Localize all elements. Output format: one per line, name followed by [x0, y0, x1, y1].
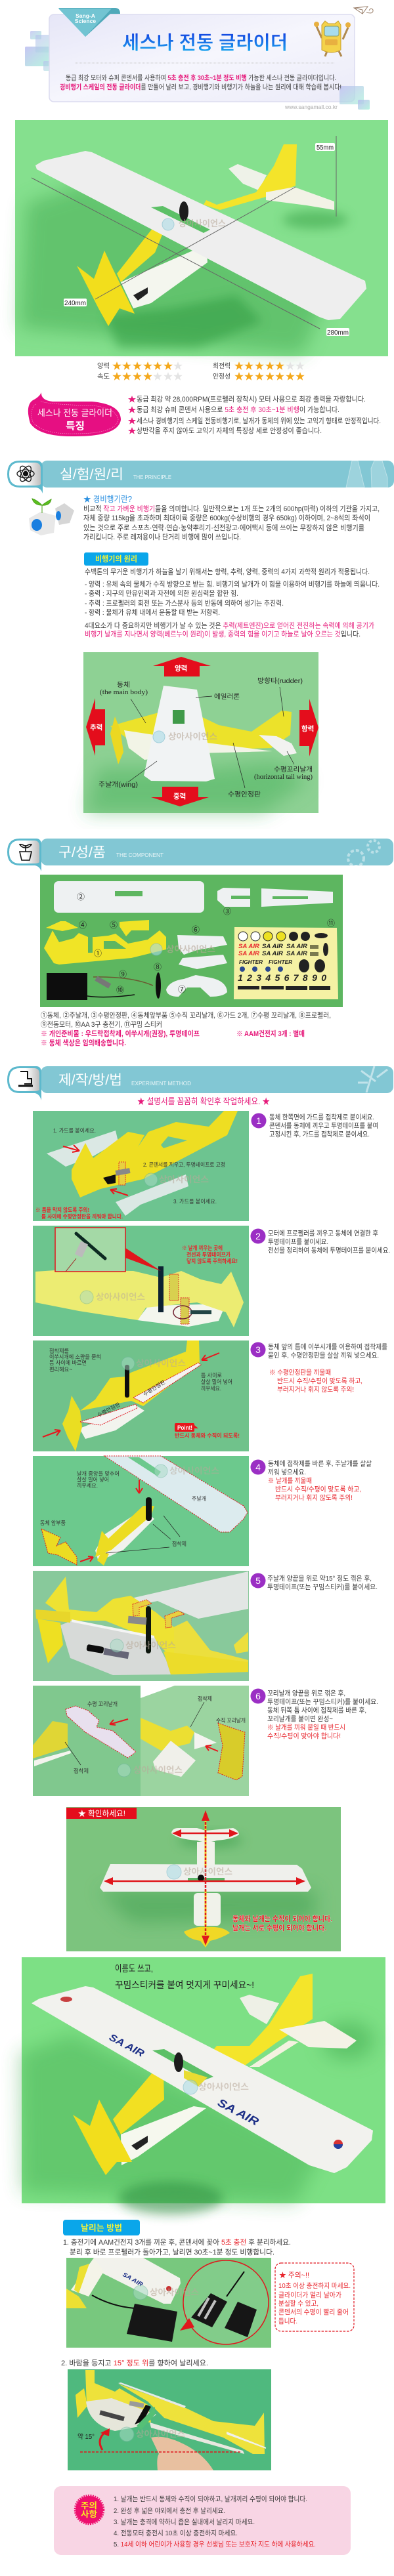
watermark: 상아사이언스: [183, 1867, 232, 1877]
photo notes: 틈 사이에 수평안정판을 끼워야 합니다.: [41, 1213, 123, 1220]
ribbon badge: Science: [75, 18, 96, 24]
section header: component: THE COMPONENT: [116, 852, 164, 858]
intro text: [60, 73, 341, 91]
photo notes: [182, 1245, 238, 1264]
point badge: Point!: [177, 1424, 192, 1431]
photo notes: [74, 1695, 246, 1774]
watermark: [150, 944, 215, 955]
step 1 text: [269, 1113, 378, 1138]
feature list: 동급 최강 약 28,000RPM(프로펠러 장착시) 모터 사용으로 최강 출력을 자랑합니다.: [137, 394, 366, 404]
check label: ★ 확인하세요!: [78, 1809, 125, 1818]
icon: dice with sprout: [29, 499, 74, 535]
rating: 안정성: [213, 372, 305, 381]
step 3 text: 부러지거나 휘지 않도록 주의!: [277, 1386, 354, 1394]
step 4 text: [268, 1460, 372, 1502]
part: tail wing: [166, 975, 227, 997]
point badge: [175, 1423, 198, 1432]
caution note: 10초 이상 충전하지 마세요.: [278, 2281, 351, 2290]
step 2 text: 투명테이프를 붙이세요.: [268, 1238, 328, 1246]
caution list: 4. 전동모터 충전시 10초 이상 충전하지 마세요.: [114, 2529, 238, 2537]
button: 비행기의 원리: [84, 552, 148, 566]
caution note: 글라이더가 멀리 날아가: [278, 2291, 341, 2299]
photo notes: 닿지 않도록 주의하세요!: [186, 1258, 238, 1264]
watermark: 상아사이언스: [136, 1358, 186, 1368]
feature list: 상반각을 주지 않아도 고익기 자체의 특징상 세로 안정성이 좋습니다.: [137, 426, 322, 435]
step 4 badge: [251, 1459, 265, 1475]
photo notes: 끼우세요.: [201, 1385, 221, 1392]
button: 날리는 방법: [63, 2220, 140, 2235]
icon: sparkle: [358, 1066, 387, 1092]
part numbers: ④: [79, 921, 87, 930]
text: definition paragraph: 있는 것으로 주로 스포츠·연락·연습·농약뿌리기·선전광고·에어택시 등에 쓰이는 무장하지 않은 비행기를: [83, 523, 364, 532]
rating: 양력: 양력: [97, 362, 110, 370]
arrow: 추력: 추력: [90, 723, 102, 732]
watermark: 상아사이언스: [166, 944, 215, 954]
step 6 text: 꼬리날개를 붙이면 완성~: [267, 1714, 333, 1723]
part labels: 수평안정판: [228, 791, 261, 799]
watermark: 상아사이언스: [168, 732, 217, 741]
part numbers: ⑪: [327, 919, 335, 928]
photo notes: 수평 꼬리날개: [87, 1701, 118, 1707]
part: propeller: [156, 972, 161, 999]
caution note: ★ 주의~!!: [279, 2271, 309, 2279]
red arrows: [110, 1719, 218, 1751]
button: 비행기의 원리: 비행기의 원리: [95, 554, 137, 564]
watermark: 상아사이언스: [136, 2429, 185, 2439]
part labels: 방향타(rudder): [257, 677, 303, 685]
text: flight principle: - 중력 : 지구의 만유인력과 자전에 의한 원심력을 합한 힘.: [85, 589, 238, 598]
text: flight principle: 비행기 날개를 지나면서 양력(베르누이 원리)이 발생, 중력의 힘을 이기고 하늘로 날아 오르는 것입니다.: [85, 629, 361, 638]
components photo: [40, 875, 343, 1007]
arrow: 항력: 항력: [301, 724, 314, 733]
section title: 제/작/방/법: [58, 1073, 122, 1088]
text: flying step 1: [63, 2237, 291, 2256]
website url: www.sangamall.co.kr: [284, 104, 338, 110]
step 5 photo: [33, 1571, 249, 1681]
icon: plant pot: [20, 844, 32, 860]
part: nose piece: [41, 1529, 77, 1565]
component caption: ※ 동체 색상은 임의배송합니다.: [41, 1038, 126, 1047]
red wedge: [125, 1248, 161, 1271]
watermark: 상아사이언스: [125, 1640, 176, 1650]
intro text: 동급 최강 모터와 슈퍼 콘덴서를 사용하여 5초 충전 후 30초~1분 정도 비행 가능한 세스나 전동 글라이더입니다.: [66, 73, 336, 82]
step 6 photo: [33, 1686, 249, 1796]
diagram photo: four forces: [83, 652, 318, 813]
section title: 구/성/품: [58, 845, 106, 860]
photo notes: 이쑤시개에 소량을 묻혀: [49, 1354, 101, 1360]
step 3 badge: 3: [255, 1344, 261, 1355]
part numbers: ⑤: [110, 921, 118, 930]
leader lines: [128, 687, 294, 788]
part: sticker sheet: SA AIR: [286, 943, 308, 949]
step 2 badge: 2: [255, 1231, 261, 1241]
photo notes: 편리해요~: [49, 1366, 72, 1373]
text: flight principle: [85, 567, 380, 638]
feature list: [128, 394, 381, 435]
check label: [66, 1808, 137, 1819]
watermark: 상아사이언스: [169, 1466, 219, 1476]
photo notes: 동체 앞부품: [40, 1520, 66, 1526]
section header: method: EXPERIMENT METHOD: [131, 1081, 191, 1087]
handwritten note: [115, 1963, 254, 1990]
photo notes: 수직 꼬리날개: [216, 1717, 246, 1724]
horizon line: [80, 2451, 241, 2453]
part labels: [98, 677, 313, 799]
arrow: 양력: 양력: [175, 664, 187, 673]
angle label: 약 15°: [77, 2433, 95, 2441]
component caption: [41, 1011, 331, 1047]
red arrows: [63, 1145, 128, 1195]
photo notes: 2. 콘덴서를 끼우고, 투명테이프로 고정: [143, 1161, 225, 1168]
dimension label: 240mm: 240mm: [64, 300, 86, 307]
rating: 속도: [97, 372, 183, 381]
photo notes: 날개 중앙을 맞추어: [77, 1470, 120, 1477]
part: stabilizer: [217, 888, 333, 907]
part: main wing: [54, 881, 204, 913]
caution list: [114, 2495, 316, 2548]
decorative squares left: [25, 31, 58, 71]
component caption: ※ AAM건전지 3개 : 별매: [236, 1029, 305, 1038]
caution list: 1. 날개는 반드시 동체와 수직이 되야하고, 날개끼리 수평이 되어야 합니다.: [114, 2495, 307, 2503]
part: motor: [93, 976, 153, 988]
caution note: 듭니다.: [278, 2317, 297, 2325]
tape mark left: [133, 1600, 152, 1616]
ratings: [97, 362, 305, 381]
part: guards: [177, 935, 227, 969]
red arrows: [43, 1353, 219, 1437]
watermark: [167, 1865, 232, 1879]
step 1 text: 고정시킨 후, 가드를 접착제로 붙이세요.: [269, 1131, 370, 1138]
text: flight principle: 4대요소가 다 중요하지만 비행기가 날 수 있는 것은 추력(제트엔진)으로 얻어진 전진하는 속력에 의해 공기가: [85, 621, 374, 630]
ribbon badge: Sang-A: [76, 12, 95, 19]
icon: atom: [17, 465, 34, 483]
step 1 text: 콘덴서를 동체에 끼우고 투명테이프를 붙여: [269, 1122, 378, 1130]
photo notes: 접착제: [198, 1695, 212, 1702]
watermark: [153, 731, 217, 743]
part labels: 동체: [117, 681, 130, 689]
step 5 badge: [251, 1573, 265, 1588]
text: flying step 2: 2. 바람을 등지고 15° 정도 위를 향하여 날리세요.: [61, 2358, 208, 2367]
rating: 회전력: 회전력: [213, 362, 230, 370]
ribbon badge: [58, 8, 120, 37]
part numbers: [77, 892, 335, 995]
part: sticker sheet: FIGHTER: [269, 959, 292, 965]
part: yellow foam: [44, 920, 166, 965]
caution list: 2. 완성 후 넓은 야외에서 충전 후 날리세요.: [114, 2506, 225, 2515]
part numbers: ⑩: [116, 986, 124, 995]
hand: [151, 2437, 213, 2470]
arrow: 추력: [86, 698, 105, 756]
hero photo: [15, 120, 388, 356]
caution list: 5. 14세 이하 어린이가 사용할 경우 선생님 또는 보호자 지도 하에 사용하세요.: [114, 2540, 316, 2548]
step 1 text: 동체 한쪽면에 가드를 접착제로 붙이세요.: [269, 1113, 374, 1121]
icon: microscope: [18, 1071, 33, 1086]
step 6 badge: [251, 1689, 265, 1703]
step 6 text: 꼬리날개 양끝을 위로 꺾은 후,: [267, 1689, 345, 1697]
part numbers: ③: [223, 907, 231, 916]
caution note: [275, 2263, 354, 2331]
watermark: 상아사이언스: [198, 2082, 249, 2092]
photo notes: 3. 가드를 붙이세요.: [173, 1198, 217, 1205]
watermark: 상아사이언스: [159, 1174, 209, 1184]
magnifier circle: [180, 2260, 269, 2344]
photo notes: 끼우세요.: [77, 1482, 98, 1489]
icon: paper plane: [354, 7, 373, 14]
handwritten note: 이름도 쓰고,: [115, 1963, 153, 1974]
photo notes: 주날개: [192, 1495, 206, 1502]
part labels: (horizontal tail wing): [254, 774, 313, 781]
intro text: 경비행기 스케일의 전동 글라이더를 만들어 날려 보고, 경비행기와 비행기가 하늘을 나는 원리에 대해 학습해 봅시다!: [60, 83, 341, 91]
component caption: ⑨전동모터, ⑩AA 3구 충전기, ⑪꾸밈 스티커: [41, 1020, 162, 1029]
step 3 text: [268, 1342, 387, 1394]
photo notes: 접착제를: [49, 1348, 69, 1354]
flying photo 1: SA AIR: [121, 2271, 144, 2288]
part: sticker sheet: SA AIR: [262, 950, 284, 957]
step 5 text: 투명테이프(또는 꾸밈스티커)를 붙이세요.: [267, 1583, 378, 1591]
photo notes: 접착제: [74, 1768, 89, 1774]
step 6 badge: 6: [255, 1691, 261, 1701]
caution list: 3. 날개는 충격에 약하니 좁은 실내에서 날리지 마세요.: [114, 2518, 255, 2526]
part: sticker sheet: [234, 927, 338, 999]
photo notes: 1. 가드를 붙이세요.: [53, 1127, 96, 1134]
caution badge: [75, 2495, 104, 2524]
text: flight principle: - 항력 : 물체가 유체 내에서 운동할 때 받는 저항력.: [85, 608, 220, 617]
part: sticker sheet: SA AIR: [238, 950, 260, 957]
step 6 text: [267, 1689, 378, 1740]
step 6 text: 동체 뒤쪽 틈 사이에 접착제를 바른 후,: [267, 1707, 366, 1714]
photo notes: 살살 밀어 넣어: [201, 1379, 232, 1385]
icon: flasks: [346, 461, 387, 488]
component caption: ①동체, ②주날개, ③수평안정판, ④동체앞부품 ⑤수직 꼬리날개, ⑥가드 2개, ⑦수평 꼬리날개, ⑧프로펠러,: [41, 1011, 331, 1020]
leader lines: [106, 1516, 180, 1553]
arrow: 양력: [153, 657, 211, 676]
step 4 text: 반드시 수직/수평이 맞도록 하고,: [275, 1485, 361, 1493]
charger box: [127, 2304, 177, 2342]
part numbers: ②: [77, 892, 85, 902]
step 4 text: 부러지거나 휘지 않도록 주의!: [275, 1494, 353, 1502]
curved red arrow: [100, 2428, 110, 2450]
part: sticker sheet: SA AIR: [286, 950, 308, 957]
step 4 text: 동체에 접착제를 바른 후, 주날개를 살살: [268, 1460, 372, 1468]
wing stickers: [60, 1997, 343, 2149]
check notes: [232, 1914, 332, 1932]
text: flight principle: - 추력 : 프로펠러의 회전 또는 가스분사 등의 반동에 의하여 생기는 추진력.: [85, 598, 284, 608]
part labels: (the main body): [100, 689, 148, 696]
handwritten note: 꾸밈스티커를 붙여 멋지게 꾸미세요~!: [115, 1980, 254, 1990]
part labels: 수평꼬리날개: [274, 766, 313, 774]
watermark: [162, 218, 226, 230]
watermark: 상아사이언스: [179, 218, 226, 228]
step 1 photo: [33, 1111, 249, 1221]
photo notes: ※ 틈을 막지 않도록 주의!: [35, 1207, 89, 1213]
check notes: 동체와 날개는 수직이 되어야 합니다.: [232, 1914, 332, 1923]
part: charger: [47, 973, 135, 1000]
watermark: 상아사이언스: [150, 2287, 199, 2297]
part: sticker sheet: SA AIR: [238, 943, 260, 949]
photo notes: 틈 사이에 바르면: [49, 1360, 87, 1366]
arrow: 항력: [299, 699, 318, 757]
feature list: 동급 최강 슈퍼 콘덴서 사용으로 5초 충전 후 30초~1분 비행이 가능합니다.: [137, 405, 339, 414]
step 5 badge: 5: [255, 1575, 261, 1586]
text: definition paragraph: 가리킵니다. 주로 레저용이나 단거리 비행에 많이 쓰입니다.: [83, 533, 241, 541]
text: definition paragraph: 비교적 작고 가벼운 비행기들을 의미합니다. 일반적으로는 1개 또는 2개의 600hp(마력) 이하의 기관을 가지고,: [83, 504, 380, 513]
watermark: [110, 1639, 176, 1652]
check photo: [66, 1807, 341, 1951]
watermark: [118, 1764, 183, 1777]
decorative squares right: [339, 86, 370, 110]
step 1 badge: 1: [256, 1115, 261, 1126]
dimension label: 55mm: 55mm: [317, 144, 334, 152]
part labels: 수평안정판: [142, 1379, 167, 1398]
part numbers: ①: [94, 949, 102, 958]
button: 날리는 방법: 날리는 방법: [81, 2223, 122, 2233]
section header: component: [7, 839, 393, 871]
caution badge: 주의: [81, 2501, 97, 2510]
photo notes: [49, 1348, 232, 1392]
watermark: [80, 1291, 145, 1304]
heading: 경비행기란: ★ 경비행기란?: [83, 494, 132, 504]
photo notes: 살살 밀어 넣어: [77, 1476, 109, 1483]
rating: 안정성: 안정성: [213, 373, 230, 381]
step 4 text: 끼워 넣으세요.: [268, 1468, 306, 1476]
step 4 badge: 4: [255, 1462, 261, 1472]
watermark: [120, 2427, 185, 2441]
rating: 회전력: [213, 362, 305, 370]
text: definition paragraph: 자체 중량 115kg을 초과하며 최대이륙 중량은 600kg(수상비행의 경우 650kg) 이하이며, 2~8석의 좌석이: [83, 513, 370, 522]
step 6 text: 투명테이프(또는 꾸밈스티커)를 붙이세요.: [267, 1698, 378, 1706]
step 6 text: ※ 날개를 끼워 붙일 때 반드시: [267, 1723, 345, 1732]
caution note: 분실할 수 있고,: [278, 2300, 318, 2308]
watermark: [133, 2285, 199, 2300]
rating: 양력: [97, 362, 183, 370]
photo notes: 접착제: [172, 1541, 186, 1547]
section header: method: [7, 1066, 393, 1100]
part: sticker sheet: SA AIR: [262, 943, 284, 949]
step 2 text: [268, 1230, 390, 1255]
title: 세스나 전동 글라이더: [122, 32, 288, 54]
icon: gears: [348, 841, 380, 866]
step 2 text: 모터에 프로펠러를 끼우고 동체에 연결한 후: [268, 1230, 378, 1237]
section header: principle: [7, 461, 394, 493]
component caption: ※ 개인준비물 : 우드락접착제, 이쑤시개(권장), 투명테이프: [41, 1029, 200, 1038]
watermark: [183, 2080, 249, 2094]
photo notes: ※ 날개 끼우는 곳에: [182, 1245, 223, 1251]
part numbers: ⑦: [178, 985, 186, 994]
step 3 photo: [33, 1340, 249, 1451]
text: flying step 1: 분리 후 바로 프로펠러가 돌아가고, 날리면 30초~1분 정도 비행합니다.: [70, 2248, 274, 2256]
leader lines: [65, 1702, 204, 1765]
red arrows: [80, 1480, 142, 1562]
top banner: [25, 7, 373, 110]
part labels: [96, 1379, 167, 1419]
step 2 badge: [251, 1228, 265, 1244]
part labels: 주날개(wing): [98, 781, 138, 789]
part labels: 에일러론: [214, 693, 240, 701]
step 5 text: 주날개 양끝을 위로 약15° 정도 꺾은 후,: [267, 1574, 372, 1583]
feature badge: [28, 392, 121, 436]
part labels: 수평안정판: [96, 1401, 121, 1419]
step 3 text: ※ 수평안정판을 끼울때: [269, 1369, 331, 1377]
step 4 text: ※ 날개를 끼울때: [268, 1477, 312, 1485]
photo notes: [40, 1470, 206, 1547]
photo notes: 틈 사이로: [201, 1372, 222, 1379]
feature badge: 세스나 전동 글라이더: [37, 408, 112, 418]
step 3 text: 묻인 후, 수평안정판을 살살 끼워 넣으세요.: [268, 1351, 379, 1360]
photo notes: 전선과 투명테이프가: [186, 1251, 230, 1258]
step 1 badge: [251, 1113, 267, 1129]
caution badge: 사항: [81, 2509, 98, 2519]
feature badge: 특징: [66, 421, 85, 432]
text: flight principle: 수백톤의 무거운 비행기가 하늘을 날기 위해서는 항력, 추력, 양력, 중력의 4가지 과학적 원리가 적용됩니다.: [85, 567, 370, 576]
flying photo 1: [66, 2258, 271, 2348]
check notes: 날개는 서로 수평이 되어야 합니다.: [232, 1923, 326, 1932]
part numbers: ⑥: [192, 925, 200, 934]
step 3 text: 반드시 수직/수평이 맞도록 하고,: [277, 1377, 362, 1385]
flying photo 2: [68, 2369, 271, 2470]
part numbers: ⑨: [119, 970, 127, 979]
red alignment arrows: [104, 1810, 305, 1945]
part numbers: ⑧: [154, 963, 162, 972]
dimension label: 280mm: 280mm: [327, 329, 349, 337]
rating: 속도: 속도: [97, 373, 110, 381]
arrow: 중력: 중력: [173, 792, 186, 800]
step 3 badge: [251, 1342, 265, 1357]
arrow: 중력: [151, 787, 209, 806]
banner panel: [49, 14, 355, 102]
watermark: [144, 1173, 209, 1186]
caution note: 콘덴서의 수명이 빨리 줄어: [278, 2308, 349, 2316]
photo notes: [35, 1127, 225, 1220]
step 4 photo: [33, 1456, 249, 1566]
wing stickers: SA AIR: [215, 2096, 261, 2129]
step 2 photo: [33, 1226, 249, 1336]
finished glider photo: [20, 1957, 385, 2214]
watermark: [121, 1357, 186, 1370]
text: flying step 1: 1. 충전기에 AAM건전지 3개를 끼운 후, 콘덴서에 꽂아 5초 충전 후 분리하세요.: [63, 2237, 291, 2247]
watermark: 상아사이언스: [96, 1292, 145, 1302]
part: sticker sheet: FIGHTER: [239, 959, 263, 965]
caution panel: [54, 2486, 351, 2555]
notice heading: ★ 설명서를 꼼꼼히 확인후 작업하세요. ★: [137, 1096, 270, 1106]
tape mark right: [165, 1611, 185, 1628]
watermark: 상아사이언스: [133, 1765, 183, 1775]
watermark: [154, 1465, 219, 1478]
step 5 text: [267, 1574, 378, 1591]
inset: motor closeup: [55, 1228, 125, 1272]
wing stickers: SA AIR: [107, 2032, 146, 2060]
icon: mascot robot: [314, 21, 351, 56]
dimension lines: [32, 136, 336, 329]
text: definition paragraph: [83, 504, 380, 541]
section header: principle: THE PRINCIPLE: [133, 474, 171, 480]
part: sticker sheet: 1234567890: [238, 972, 326, 983]
point note: 반드시 동체와 수직이 되도록!: [175, 1432, 240, 1439]
section title: 실/험/원/리: [60, 467, 123, 482]
step 6 text: 수직/수평이 맞아야 합니다!: [267, 1732, 341, 1740]
